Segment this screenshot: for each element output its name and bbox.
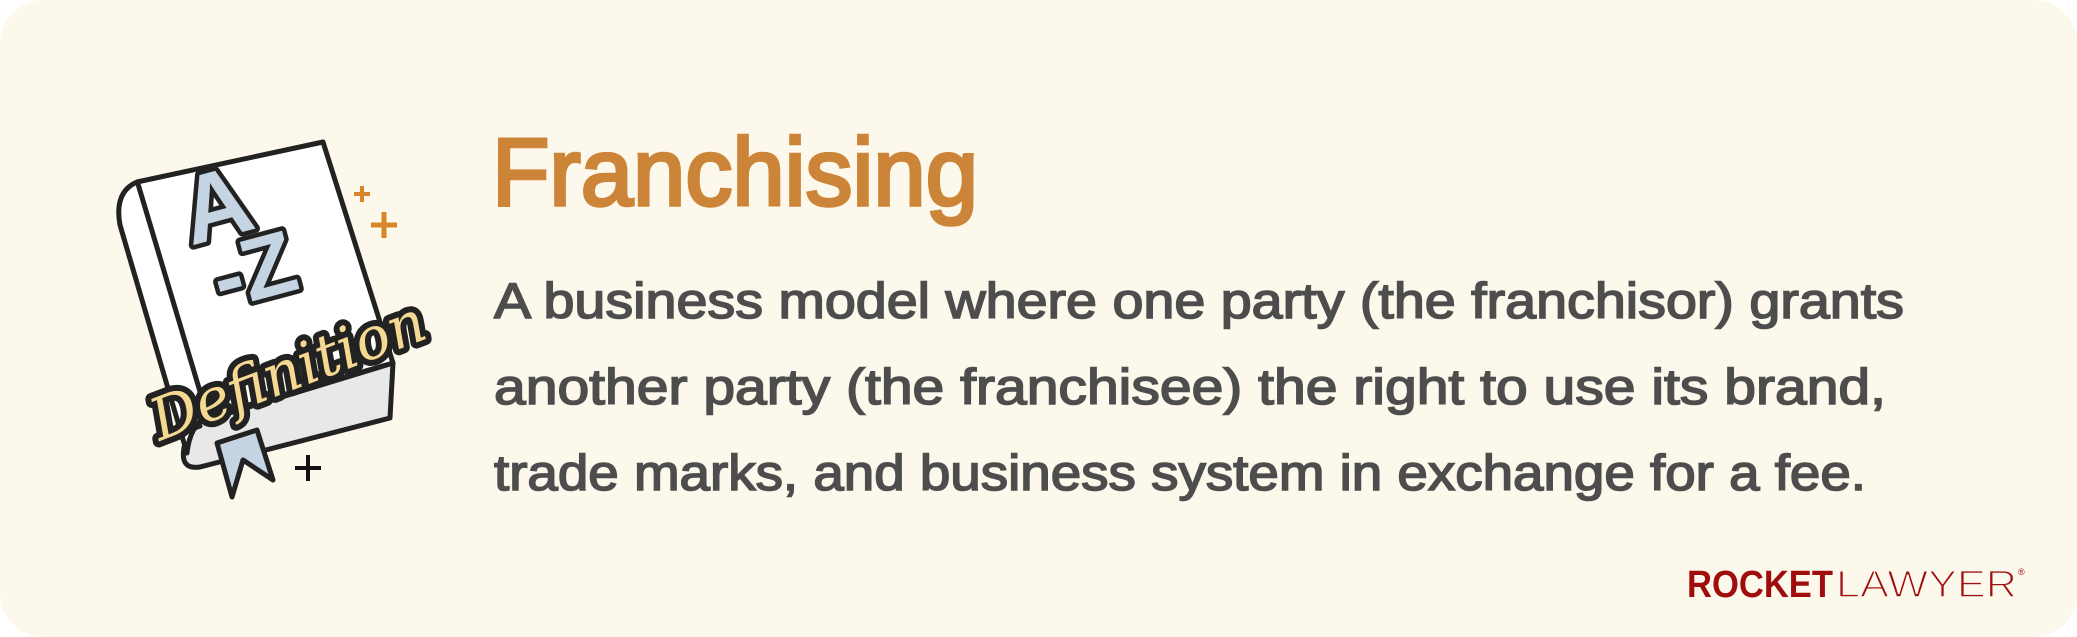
icon: A-Z definition book xyxy=(119,142,435,497)
text block: definition: another party (the franchisee) the right to use its brand, xyxy=(494,359,1886,415)
text block: definition xyxy=(494,273,1904,501)
icon: sparkles xyxy=(295,186,397,481)
icon: A-Z definition book: A xyxy=(169,145,263,266)
icon: A-Z definition book: Definition xyxy=(139,287,435,455)
icon: A-Z definition book: -Z xyxy=(201,211,307,328)
title: Franchising xyxy=(492,119,978,226)
text block: definition: A business model where one party (the franchisor) grants xyxy=(494,273,1904,329)
text block: definition: trade marks, and business system in exchange for a fee. xyxy=(494,445,1866,501)
logo: Rocket Lawyer: ROCKET xyxy=(1687,564,1833,606)
logo: Rocket Lawyer xyxy=(1687,564,2025,606)
logo: Rocket Lawyer: LAWYER xyxy=(1836,564,2017,606)
logo: Rocket Lawyer: ® xyxy=(2018,567,2025,577)
